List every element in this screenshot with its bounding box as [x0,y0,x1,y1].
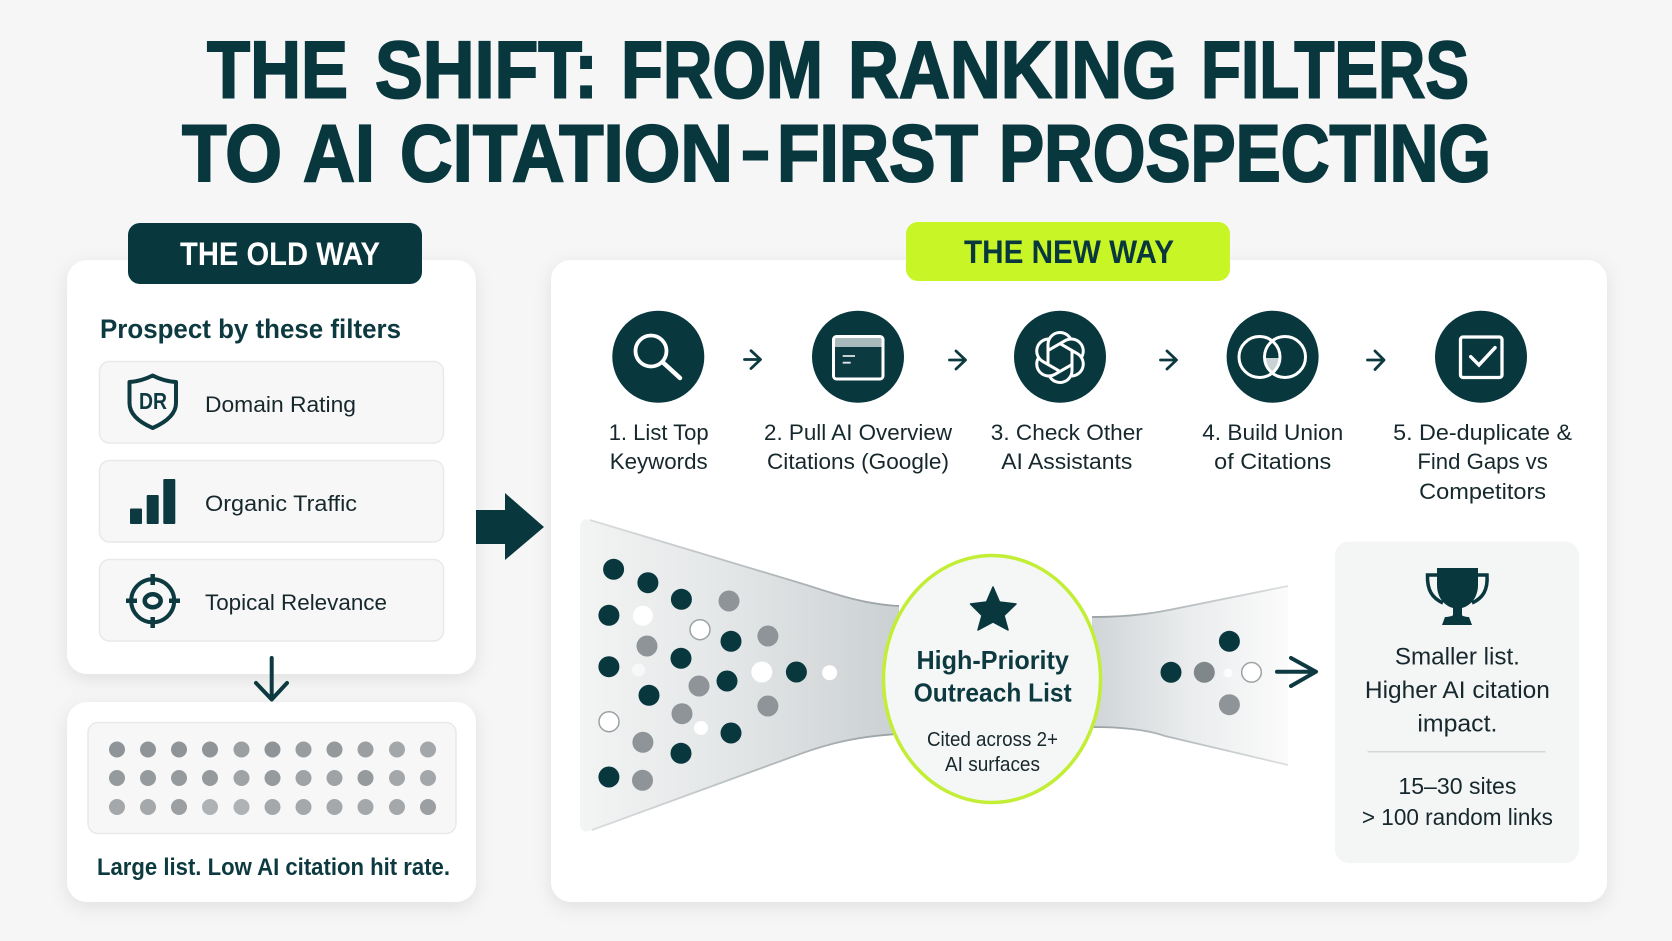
title: TO [182,109,282,199]
panel: result [1335,542,1579,863]
text: cited across surfaces: AI surfaces [945,754,1040,776]
label: step 1: 1. List Top [609,420,709,445]
title [182,26,1491,199]
arrow: step 2 to 3 [950,351,966,369]
heading: high-priority outreach list: Outreach List [914,678,1072,708]
label: step 3 [991,420,1143,474]
arrow: filters to large list [256,658,287,700]
title: PROSPECTING [999,109,1491,199]
icon: DR shield: DR [139,388,167,414]
icon: target [126,574,180,628]
step 3: check other AI assistants [991,311,1143,474]
title: THE [207,26,348,116]
heading: high-priority outreach list: High-Priority [916,645,1069,675]
badge: the new way [906,222,1230,281]
icon: star [970,587,1016,630]
caption: large list: Large list. Low AI citation hit rate. [97,854,450,881]
icon: DR shield [130,376,176,428]
badge: the old way: THE OLD WAY [180,236,380,272]
funnel: wide input [580,519,899,831]
icon: trophy [1427,568,1487,625]
text: sites versus links: > 100 random links [1362,804,1553,830]
text: smaller list impact: Higher AI citation [1365,677,1550,704]
dots: prospects entering funnel [598,559,837,791]
title: – [742,105,769,195]
title: RANKING [848,26,1177,116]
title: FROM [621,26,823,116]
panel: the new way [551,222,1607,902]
text: smaller list impact: impact. [1417,711,1497,738]
title: FILTERS [1201,26,1469,116]
badge: the old way [128,223,422,284]
label: domain rating: Domain Rating [205,392,356,417]
arrow: funnel to result [1277,658,1316,686]
label: step 4 [1202,420,1343,474]
title: SHIFT: [375,26,598,116]
step 2: pull AI overview citations [764,311,953,474]
text: sites versus links: 15–30 sites [1398,773,1516,799]
panel: the old way filters [67,223,476,674]
icon: venn circles [1227,311,1319,403]
title: AI [303,109,375,199]
dot grid [88,722,456,834]
label: step 1: Keywords [610,449,708,474]
heading: high-priority outreach list [914,645,1072,708]
label: step 2: Citations (Google) [767,449,949,474]
label: step 2: 2. Pull AI Overview [764,420,953,445]
arrow: old way to new way [476,493,544,560]
dots: filtered prospects [1160,631,1261,715]
icon: browser window [812,311,904,403]
icon: checkbox [1435,311,1527,403]
label: organic traffic: Organic Traffic [205,491,357,516]
label: step 5: Competitors [1419,479,1546,504]
step 4: build union of citations [1202,311,1343,474]
filter row: domain rating [100,362,444,443]
label: step 4: 4. Build Union [1202,420,1343,445]
label: step 2 [764,420,953,474]
callout: high-priority outreach list [884,556,1100,802]
filter row: topical relevance [100,560,444,641]
label: step 1 [609,420,709,474]
icon: bar chart [130,479,175,524]
arrow: step 1 to 2 [744,351,760,368]
text: sites versus links [1362,773,1553,830]
text: smaller list impact [1365,644,1550,738]
label: step 3: AI Assistants [1001,449,1132,474]
heading: prospect by these filters: Prospect by these filters [100,314,401,344]
label: topical relevance: Topical Relevance [205,590,387,615]
filter row: organic traffic [100,460,444,542]
icon: magnifier [612,311,704,403]
title: FIRST [777,109,978,199]
text: cited across surfaces: Cited across 2+ [927,729,1058,751]
step 1: list top keywords [609,311,709,474]
title: CITATION [400,109,733,199]
step 5: de-duplicate and find gaps [1393,311,1572,504]
text: cited across surfaces [927,729,1058,776]
label: step 5: Find Gaps vs [1417,449,1548,474]
icon: AI knot [1014,311,1106,403]
panel: large list [67,702,476,902]
badge: the new way: THE NEW WAY [964,234,1174,270]
funnel: narrow output [1092,586,1288,765]
label: step 4: of Citations [1214,449,1331,474]
text: smaller list impact: Smaller list. [1395,644,1520,671]
label: step 3: 3. Check Other [991,420,1143,445]
arrow: step 4 to 5 [1368,351,1384,370]
label: step 5: 5. De-duplicate & [1393,420,1572,445]
label: step 5 [1393,420,1572,504]
arrow: step 3 to 4 [1160,351,1176,369]
